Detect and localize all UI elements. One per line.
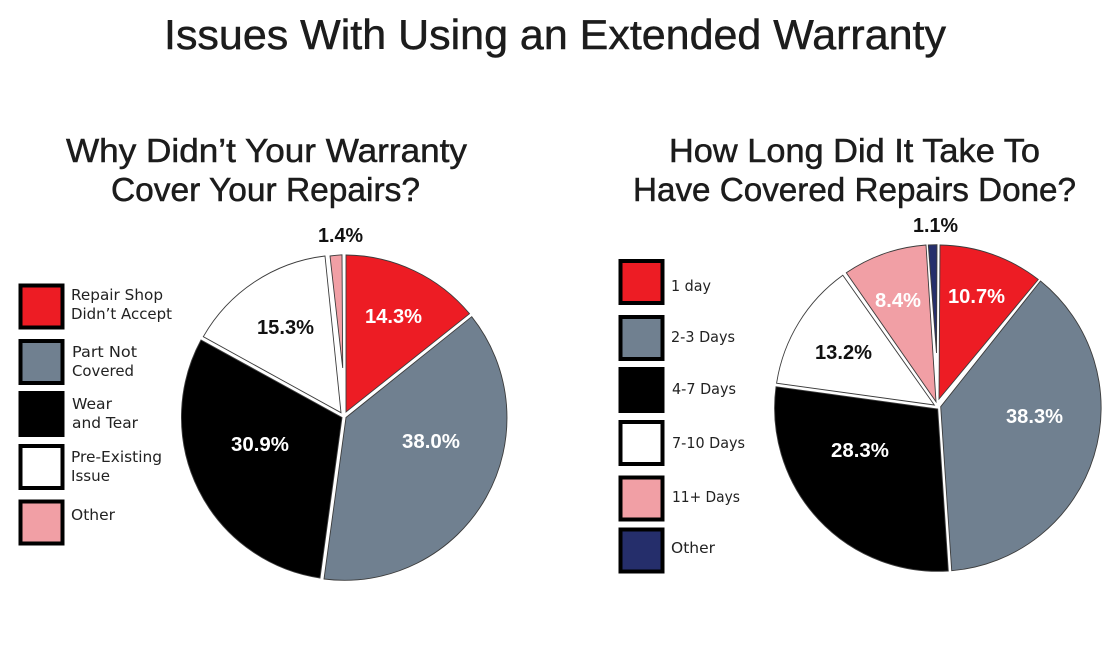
legend item: repair shop didn't accept: Didn’t Accept <box>71 305 172 323</box>
label 28.3%: 28.3% <box>831 440 889 462</box>
legend item: 11+ days <box>620 478 740 520</box>
slice: part not covered 38.0% <box>324 317 507 580</box>
slice: 11+ days 8.4% <box>846 245 936 402</box>
legend item: wear and tear: Wear <box>72 395 113 413</box>
legend item: other: Other <box>671 539 716 557</box>
legend item: other <box>620 530 716 572</box>
legend: warranty reasons <box>20 286 172 544</box>
legend item: 7-10 days <box>620 422 745 464</box>
label 1.4%: 1.4% <box>318 225 363 247</box>
legend item: pre-existing issue <box>20 446 162 488</box>
slice: other 1.1% <box>928 245 937 353</box>
label 38.3%: 38.3% <box>1006 406 1063 428</box>
slice: 1 day 10.7% <box>939 245 1038 399</box>
legend item: 11+ days: 11+ Days <box>672 488 740 506</box>
pie chart: repair duration <box>775 215 1101 571</box>
slice: repair shop 14.3% <box>346 255 470 412</box>
right chart heading: Have Covered Repairs Done? <box>633 171 1076 208</box>
label 1.1%: 1.1% <box>913 215 958 237</box>
right chart heading: How Long Did It Take To <box>669 132 1040 169</box>
legend item: repair shop didn't accept: Repair Shop <box>71 286 163 304</box>
legend item: other: Other <box>71 506 116 524</box>
right chart heading <box>633 132 1076 208</box>
legend item: 1 day: 1 day <box>671 277 711 295</box>
legend item: repair shop didn't accept <box>20 286 172 328</box>
legend item: wear and tear <box>20 393 139 435</box>
slice: wear and tear 30.9% <box>181 340 342 578</box>
legend item: part not covered: Covered <box>72 362 134 380</box>
left chart heading <box>66 132 468 208</box>
legend item: wear and tear: and Tear <box>72 414 139 432</box>
legend item: 1 day <box>620 261 711 303</box>
left chart heading: Why Didn’t Your Warranty <box>66 132 468 169</box>
label 38.0%: 38.0% <box>402 431 460 453</box>
title: Issues With Using an Extended Warranty <box>164 11 946 58</box>
legend item: pre-existing issue: Issue <box>71 467 110 485</box>
slice: other 1.4% <box>330 255 343 368</box>
legend item: 4-7 days <box>620 369 736 411</box>
legend item: part not covered: Part Not <box>72 343 137 361</box>
label 13.2%: 13.2% <box>815 342 872 364</box>
slice: 2-3 days 38.3% <box>941 281 1101 571</box>
label 14.3%: 14.3% <box>365 306 422 328</box>
pie chart: warranty reasons <box>181 225 507 580</box>
slice: 4-7 days 28.3% <box>775 387 948 571</box>
slice: pre-existing 15.3% <box>203 256 341 413</box>
legend item: 2-3 days <box>620 317 735 359</box>
label 8.4%: 8.4% <box>875 290 921 312</box>
legend item: pre-existing issue: Pre-Existing <box>71 448 162 466</box>
legend: repair duration <box>620 261 745 572</box>
left chart heading: Cover Your Repairs? <box>111 171 420 208</box>
label 15.3%: 15.3% <box>257 317 314 339</box>
legend item: 7-10 days: 7-10 Days <box>672 434 745 452</box>
slice: 7-10 days 13.2% <box>777 275 934 405</box>
legend item: 2-3 days: 2-3 Days <box>671 328 735 346</box>
label 30.9%: 30.9% <box>231 434 289 456</box>
label 10.7%: 10.7% <box>948 286 1005 308</box>
legend item: 4-7 days: 4-7 Days <box>672 380 736 398</box>
legend item: part not covered <box>20 341 137 383</box>
legend item: other <box>20 502 116 544</box>
